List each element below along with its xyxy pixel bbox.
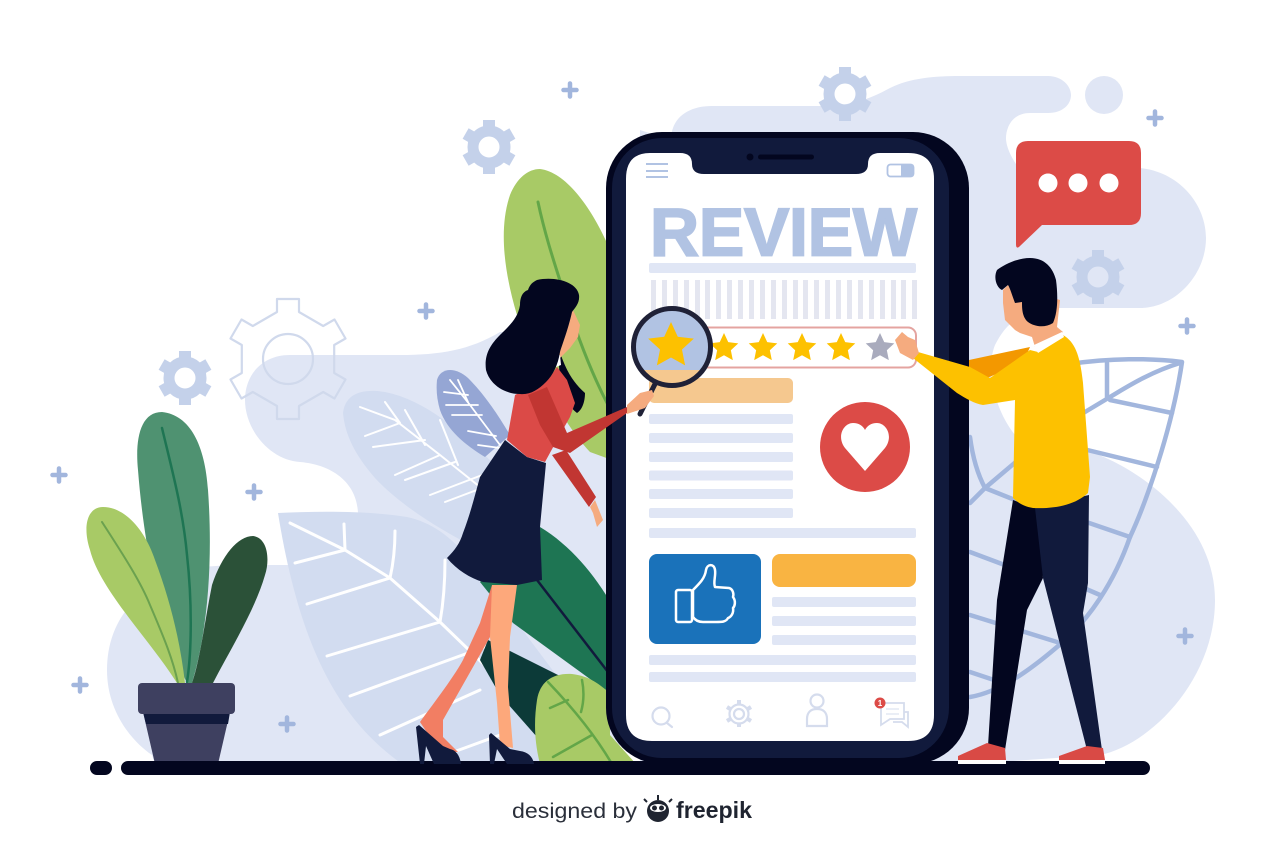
character: woman [416,279,627,764]
bottom nav icons [652,694,908,727]
large pale leaf left [278,512,560,764]
small light green leaf [535,674,636,764]
woman back hair [558,345,585,413]
woman legs [420,585,517,752]
man face [1003,285,1063,347]
man back arm [969,347,1030,378]
background blobs [107,76,1215,764]
icon: outline gear [230,299,346,419]
man collar [1034,332,1064,353]
tall light green leaf [504,169,612,460]
heading: REVIEW: REVIEW [650,194,918,270]
pot [138,683,235,764]
woman shoes [416,725,534,764]
text lines [649,414,916,538]
icon: chat [881,703,908,727]
woman neck and face [550,300,580,358]
icon: profile [807,694,827,726]
notification badge: 1 [878,699,883,708]
icon: freepik mascot [644,795,672,822]
rating box with stars [640,328,916,368]
plant: dark leaf [192,536,267,683]
icon: toggle [888,164,914,177]
phone screen [626,153,934,741]
barcode ticks [651,280,917,319]
man shoes [958,743,1105,764]
subheading bar [649,263,916,273]
icon: filled gears [159,67,1124,405]
notification badge [874,698,886,708]
character: man [895,258,1105,764]
magnifying glass [627,305,715,414]
orange bar and lines [649,554,916,682]
woman torso [507,367,575,462]
man sweater [913,335,1090,508]
large outline leaf right [970,359,1182,697]
icon: settings [727,700,751,727]
plant: lime leaf [86,507,185,683]
man hair [995,258,1057,326]
orange title bar [649,378,793,403]
phone [606,132,969,764]
icon: thumbs up card [649,554,761,644]
dark green leaves [480,527,612,737]
man hand [895,332,919,360]
phone body [606,132,969,764]
speech bubble [1016,141,1141,248]
ground line [90,761,1150,775]
woman hand [627,390,654,414]
footer credit: designed by [512,799,637,823]
icon: search [652,708,672,727]
speaker [746,154,814,160]
woman hair [486,279,579,394]
icon: menu [646,164,668,177]
man trousers [988,495,1102,750]
footer credit: freepik [676,797,752,823]
woman skirt [447,440,546,585]
woman upper arm [528,387,627,453]
plant: green leaf [137,412,210,683]
medium pale leaf [343,391,500,550]
icon: heart badge [820,402,910,492]
woman lower hand [590,500,603,527]
potted plant [86,412,267,764]
small blue leaf [437,370,510,457]
woman collar [554,355,561,367]
woman lower arm [552,450,596,507]
decorative plus signs [52,84,1194,730]
footer credit [512,795,752,823]
